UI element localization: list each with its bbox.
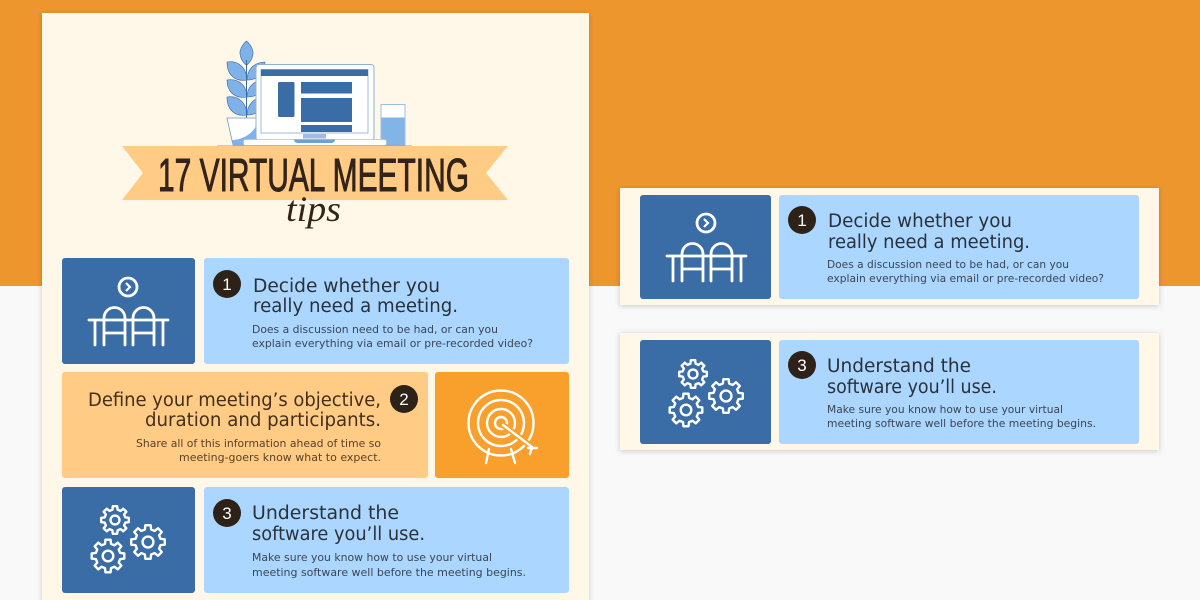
heading: Decide whether you: [828, 211, 1012, 232]
tip 3 body: Make sure you know how to use your virtual: [252, 551, 492, 564]
banner ribbon: [122, 146, 508, 200]
icon box: gears: [62, 487, 195, 593]
tip 3 heading: Understand the: [252, 503, 399, 524]
text card: explain everything via email or pre-recorded video?: [827, 272, 1104, 285]
number badge 1: 1: [222, 275, 232, 294]
tip 1 text card: [204, 258, 569, 364]
illustration: laptop, plant and glass: [217, 41, 412, 146]
subtitle: tips: tips: [286, 189, 341, 229]
icon box: target: [435, 372, 569, 478]
panel: tip 2: [62, 372, 569, 478]
panel: tip 3: [62, 487, 569, 593]
tip 2 text card: [62, 372, 428, 478]
number badge 1: 1: [797, 211, 807, 230]
text card: software you’ll use.: [827, 377, 997, 398]
tip 1 text card: explain everything via email or pre-recorded video?: [252, 337, 533, 350]
number badge 2: [390, 385, 418, 413]
icon: pot: [227, 118, 258, 145]
body: Make sure you know how to use your virtual: [827, 403, 1063, 416]
body: Does a discussion need to be had, or can you: [827, 258, 1069, 271]
icon box: meeting: [640, 195, 771, 299]
tip 2 body: Share all of this information ahead of time so: [136, 437, 381, 450]
tip 2 heading: Define your meeting’s objective,: [88, 390, 381, 411]
text card: really need a meeting.: [828, 232, 1030, 253]
number badge 3: 3: [222, 504, 232, 523]
icon: glass: [381, 104, 405, 146]
icon box: gears: [640, 340, 771, 444]
icon: laptop: [244, 64, 386, 146]
number badge 3: [788, 351, 816, 379]
tip 1 body: Does a discussion need to be had, or can you: [252, 323, 498, 336]
tip 1 text card: really need a meeting.: [253, 296, 458, 317]
tip 2 text card: meeting-goers know what to expect.: [179, 451, 381, 464]
panel: tip 1: [62, 258, 569, 364]
number badge 3: [213, 499, 241, 527]
number badge 1: [213, 270, 241, 298]
icon: plant: [227, 41, 265, 118]
icon box: meeting: [62, 258, 195, 364]
background: orange top band: [0, 0, 1200, 286]
tip 2 text card: duration and participants.: [145, 410, 381, 431]
text card: [779, 195, 1139, 299]
panel: infographic page: [42, 13, 589, 600]
tip 1 heading: Decide whether you: [253, 276, 440, 297]
tip 3 text card: meeting software well before the meeting begins.: [252, 566, 526, 579]
text card: meeting software well before the meeting begins.: [827, 417, 1096, 430]
number badge 1: [788, 206, 816, 234]
callout card: tip 1: [620, 188, 1159, 305]
callout card: tip 3: [620, 333, 1159, 450]
number badge 3: 3: [797, 356, 807, 375]
tip 3 text card: software you’ll use.: [252, 524, 425, 545]
text card: [779, 340, 1139, 444]
title: 17 VIRTUAL MEETING: [158, 149, 469, 201]
number badge 2: 2: [399, 390, 409, 409]
heading: Understand the: [827, 356, 971, 377]
tip 3 text card: [204, 487, 569, 593]
